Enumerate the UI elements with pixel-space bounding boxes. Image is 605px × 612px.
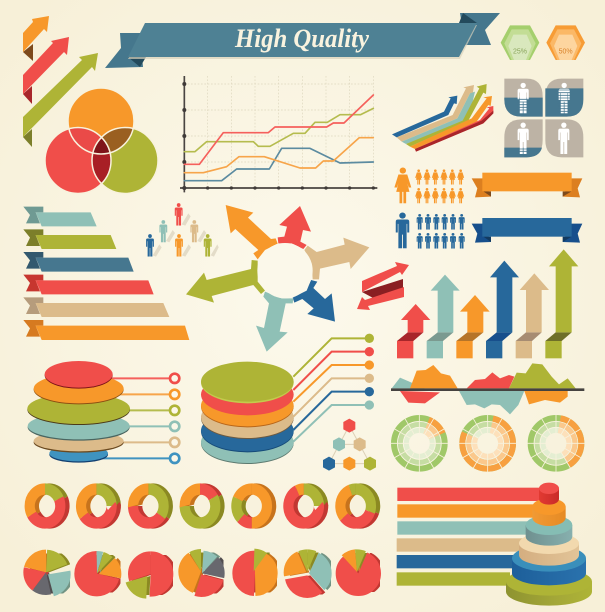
arrow red bbox=[278, 206, 311, 249]
hexagon 50 percent: 50% bbox=[559, 48, 573, 55]
ribbon green bbox=[23, 229, 116, 249]
cylinder teal bbox=[526, 515, 572, 546]
pie 3 bbox=[136, 563, 165, 587]
ring chart 3 bbox=[527, 415, 585, 472]
ribbon orange bbox=[23, 320, 189, 340]
ring chart 2 bbox=[459, 415, 516, 472]
arrow orange bbox=[226, 205, 278, 259]
center circle bbox=[257, 243, 313, 298]
percent hexagons bbox=[501, 25, 585, 60]
donut 7 bbox=[340, 489, 375, 523]
ribbon teal bbox=[23, 207, 97, 226]
connector lines bbox=[102, 374, 179, 463]
radial arrows bbox=[186, 205, 369, 352]
pie 6 bbox=[295, 561, 323, 587]
icon: red arrow bbox=[23, 37, 69, 104]
tile bottom left bbox=[504, 119, 543, 157]
icon: orange arrow bbox=[23, 16, 49, 61]
red double arrow bbox=[357, 262, 409, 310]
arrow teal bbox=[256, 292, 293, 352]
line chart bbox=[180, 76, 377, 192]
3D ribbon arrows bbox=[392, 84, 493, 152]
connector lines bbox=[293, 338, 365, 442]
title: High Quality bbox=[234, 24, 369, 53]
donut chart row bbox=[30, 489, 375, 523]
venn diagram bbox=[45, 88, 158, 194]
tile top right bbox=[545, 79, 583, 117]
area chart bbox=[391, 363, 584, 414]
men icons bbox=[396, 212, 465, 249]
chart axes bbox=[180, 76, 377, 192]
donut 2 bbox=[81, 489, 116, 523]
chart lines bbox=[184, 95, 373, 181]
donut 5 bbox=[236, 489, 271, 523]
diagonal arrows top left bbox=[23, 16, 98, 147]
rising arrows bbox=[397, 249, 578, 358]
ribbon sand bbox=[23, 297, 169, 317]
people percentage tiles bbox=[504, 79, 583, 157]
blue ribbon bbox=[472, 218, 582, 243]
stacked cylinder pyramid bbox=[506, 483, 592, 606]
donut 3 bbox=[133, 489, 168, 523]
tile bottom right bbox=[545, 119, 583, 157]
donut 4 bbox=[185, 489, 219, 523]
donut 6 bbox=[288, 489, 323, 523]
pie 5 bbox=[242, 560, 269, 585]
orange ribbon bbox=[472, 173, 582, 197]
stacked discs right bbox=[201, 334, 374, 464]
arrow blue bbox=[293, 280, 335, 322]
stepped ribbons bbox=[23, 207, 189, 340]
pie 4 bbox=[190, 560, 216, 586]
tile top left bbox=[504, 79, 543, 117]
pie 2 bbox=[86, 562, 113, 585]
donut 1 bbox=[30, 489, 64, 523]
pie 1 bbox=[35, 561, 62, 586]
arrow green bbox=[186, 260, 265, 303]
stacked discs left bbox=[27, 361, 179, 463]
ribbon red bbox=[23, 275, 154, 294]
cylinder sand bbox=[519, 533, 579, 566]
hexagon network bbox=[323, 419, 376, 471]
women icons bbox=[394, 167, 464, 203]
people cluster bbox=[146, 203, 219, 257]
ring chart 1 bbox=[391, 415, 448, 472]
horizontal bars bbox=[397, 488, 544, 586]
title banner bbox=[105, 13, 500, 68]
people and ribbons bbox=[394, 167, 582, 358]
disc layers bbox=[27, 361, 130, 463]
arrow sand bbox=[304, 238, 369, 279]
cylinder blue bbox=[512, 545, 586, 585]
ribbon blue bbox=[23, 252, 134, 272]
icon: green arrow bbox=[23, 53, 98, 147]
disc layers bbox=[201, 362, 294, 464]
cylinder red bbox=[539, 483, 559, 505]
hexagon 25 percent: 25% bbox=[513, 48, 527, 55]
pie chart row bbox=[35, 560, 373, 587]
pie 7 bbox=[346, 561, 373, 585]
cylinder orange bbox=[532, 498, 566, 526]
cylinder green bbox=[506, 568, 592, 606]
